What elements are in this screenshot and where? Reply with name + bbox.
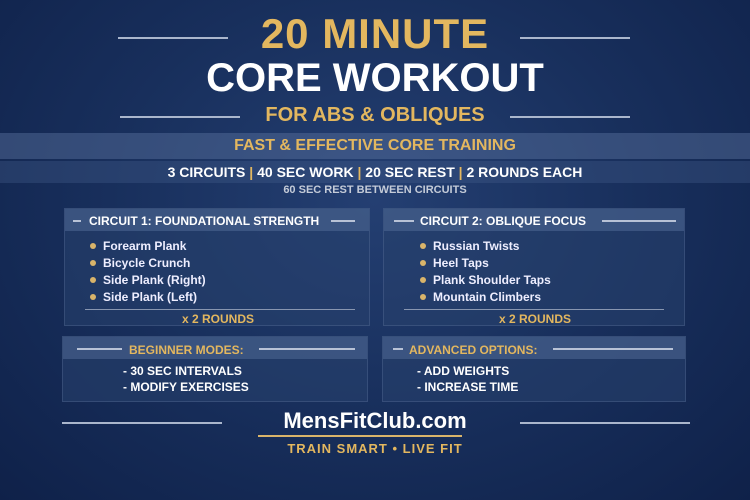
rest note: 60 SEC REST BETWEEN CIRCUITS [283,184,467,196]
banner: FAST & EFFECTIVE CORE TRAINING [234,137,516,154]
panel: advanced options [382,336,686,402]
panel: circuit 1: Forearm Plank [103,239,186,253]
panel: circuit 2: x 2 ROUNDS [499,312,571,326]
panel: circuit 2: Plank Shoulder Taps [433,273,551,287]
panel: circuit 2: Heel Taps [433,256,489,270]
panel: beginner modes: - MODIFY EXERCISES [123,380,249,394]
footer brand: MensFitClub.com [283,408,467,433]
panel: circuit 1 [64,208,370,326]
panel: advanced options: ADVANCED OPTIONS: [409,343,537,357]
panel: circuit 2: Mountain Climbers [433,290,541,304]
panel: beginner modes: BEGINNER MODES: [129,343,244,357]
stats row [0,161,750,183]
title: 20 minute: 20 MINUTE [261,10,489,57]
panel: circuit 1: x 2 ROUNDS [182,312,254,326]
subtitle: FOR ABS & OBLIQUES [265,104,485,126]
heading: circuit 1: CIRCUIT 1: FOUNDATIONAL STRENGTH [89,214,319,228]
panel: advanced options: - INCREASE TIME [417,380,518,394]
panel: circuit 2 [383,208,685,326]
panel: circuit 1: Side Plank (Right) [103,273,206,287]
tagline: TRAIN SMART • LIVE FIT [287,441,463,456]
heading: circuit 2: CIRCUIT 2: OBLIQUE FOCUS [420,214,586,228]
panel: beginner modes [62,336,368,402]
panel: circuit 1: Bicycle Crunch [103,256,190,270]
stats row: 3 CIRCUITS | 40 SEC WORK | 20 SEC REST | 2 ROUNDS EACH [168,164,582,180]
panel: circuit 2: Russian Twists [433,239,519,253]
banner [0,133,750,159]
panel: beginner modes: - 30 SEC INTERVALS [123,364,242,378]
panel: advanced options: - ADD WEIGHTS [417,364,509,378]
panel: circuit 1: Side Plank (Left) [103,290,197,304]
title: core workout: CORE WORKOUT [206,56,544,100]
